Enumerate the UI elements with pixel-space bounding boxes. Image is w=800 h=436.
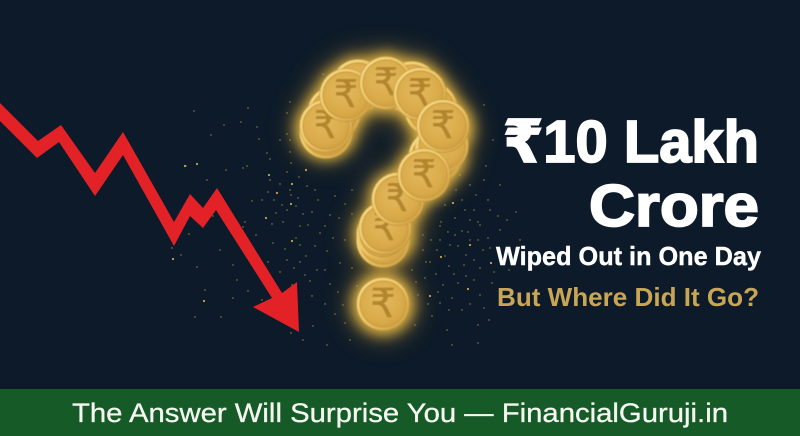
front coin stack: ₹: [408, 73, 432, 115]
back coins: [300, 60, 468, 268]
bottom dot coin: [356, 278, 410, 330]
question mark made of rupee coins: [296, 53, 473, 336]
falling red arrow: [0, 103, 299, 332]
front coin stack: ₹: [412, 154, 436, 196]
headline line 2: Crore: [589, 173, 759, 239]
bottom dot coin: ₹: [370, 282, 396, 326]
front coin stack: ₹: [431, 105, 455, 147]
footer text: The Answer Will Surprise You — FinancialGuruji.in: [72, 398, 728, 428]
subheading: Wiped Out in One Day: [496, 241, 762, 271]
footer banner: [0, 389, 800, 436]
front coin stack: ₹: [373, 207, 397, 249]
front coin stack: ₹: [314, 105, 338, 147]
front coin stack: ₹: [334, 74, 358, 116]
wide coin glow: [296, 53, 473, 336]
front coin stack: ₹: [386, 178, 410, 220]
headline: [503, 109, 759, 239]
front coin stack: [300, 56, 470, 254]
gold question line: But Where Did It Go?: [497, 282, 759, 312]
tight coin glow: [296, 54, 473, 334]
front coin stack: ₹: [374, 62, 398, 104]
headline line 1: ₹10 Lakh: [503, 109, 759, 175]
gold dust particles: [172, 74, 520, 345]
